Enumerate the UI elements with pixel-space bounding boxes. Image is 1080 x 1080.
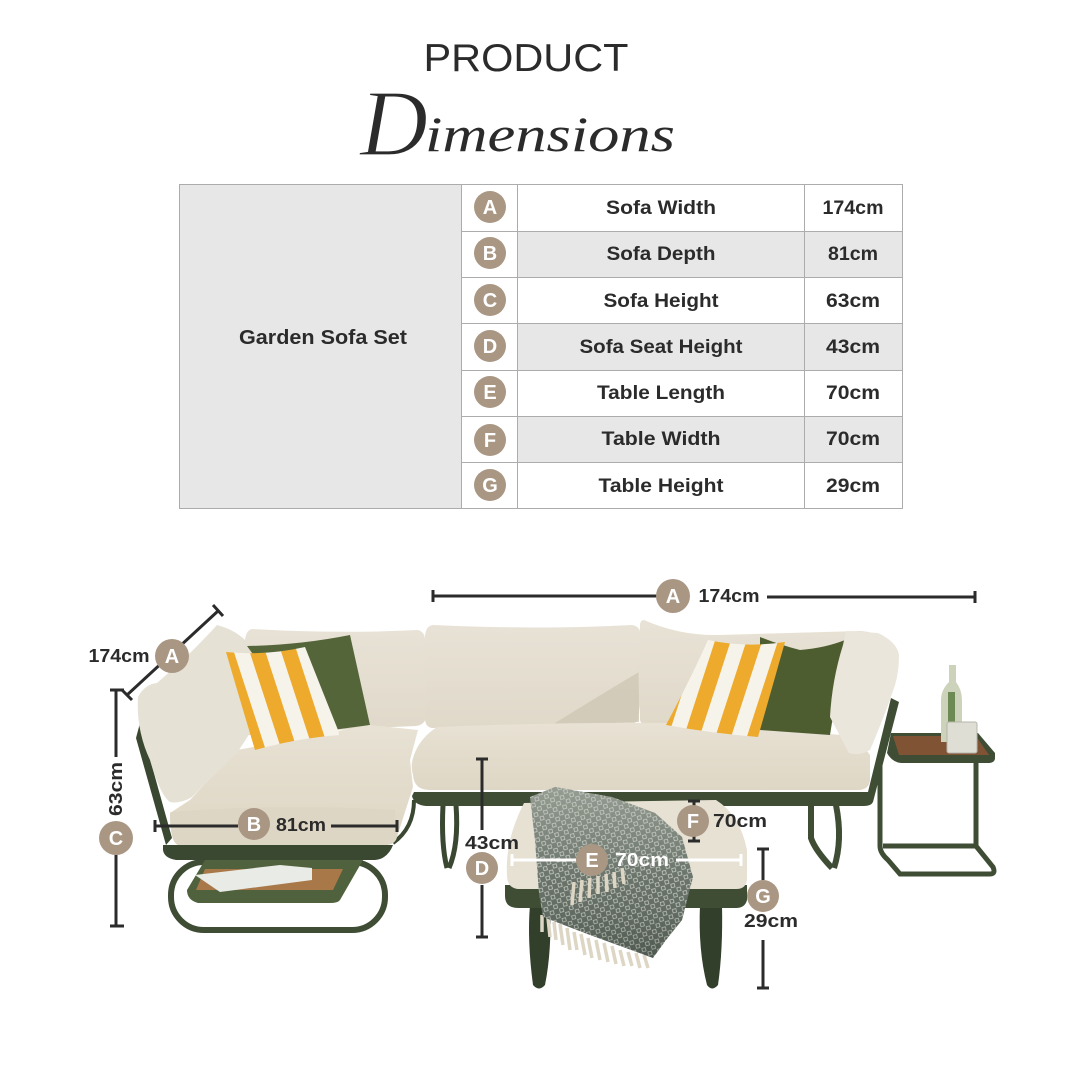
measurement A left bbox=[88, 605, 223, 700]
right arm cushion bbox=[830, 631, 899, 754]
value: 70cm bbox=[615, 849, 669, 870]
ottoman legs bbox=[529, 905, 722, 988]
dimensions table bbox=[180, 184, 902, 508]
measurement D bbox=[465, 759, 519, 937]
badge: F bbox=[687, 811, 699, 833]
centre leg of sofa bbox=[442, 805, 457, 868]
row E text: Table Length bbox=[597, 383, 725, 404]
badge B: B bbox=[483, 243, 497, 265]
measurement F bbox=[677, 801, 767, 841]
blanket light overlay bbox=[530, 787, 693, 958]
badge G bbox=[474, 469, 506, 501]
blanket inner fringe bbox=[572, 868, 624, 905]
side table bbox=[880, 665, 995, 874]
badge D bbox=[474, 330, 506, 362]
badge bbox=[238, 808, 270, 840]
row D text: 43cm bbox=[826, 337, 880, 358]
badge F: F bbox=[484, 430, 496, 452]
right back cushion 1 bbox=[424, 625, 641, 728]
badge: E bbox=[585, 850, 599, 872]
badge G: G bbox=[482, 475, 498, 497]
measurement B bbox=[155, 808, 397, 840]
badge E bbox=[474, 376, 506, 408]
ottoman frame bbox=[505, 885, 747, 908]
row C text bbox=[604, 291, 880, 312]
title: Dimensions script: imensions bbox=[425, 106, 675, 162]
left rear back cushion bbox=[245, 629, 426, 735]
value: 174cm bbox=[698, 585, 760, 606]
badge B bbox=[474, 237, 506, 269]
right sofa frame bbox=[412, 698, 899, 806]
shaded row D bbox=[517, 323, 902, 370]
bottle and glass bbox=[941, 665, 977, 753]
badge: G bbox=[755, 886, 771, 908]
badge F bbox=[474, 424, 506, 456]
row A text: Sofa Width bbox=[606, 198, 716, 219]
row E text: 70cm bbox=[826, 383, 880, 404]
badge: A bbox=[666, 586, 680, 608]
badge bbox=[656, 579, 690, 613]
row D text bbox=[580, 337, 880, 358]
value: 81cm bbox=[276, 814, 326, 835]
badge A bbox=[474, 191, 506, 223]
panel: product name cell bbox=[180, 185, 461, 508]
left frame back bbox=[136, 723, 172, 845]
shadow on back cushion bbox=[552, 672, 639, 725]
title: PRODUCT: PRODUCT bbox=[424, 37, 628, 80]
left under loop bbox=[171, 862, 385, 930]
blanket fringe lower bbox=[542, 915, 648, 968]
left shelf bbox=[187, 860, 363, 903]
title: Dimensions script: D bbox=[358, 72, 428, 176]
measurement C bbox=[99, 690, 133, 926]
garden sofa illustration bbox=[136, 620, 995, 988]
row G text: Table Height bbox=[598, 476, 724, 497]
measurement A top bbox=[433, 579, 975, 613]
badge A: A bbox=[483, 197, 497, 219]
shaded row B bbox=[517, 231, 902, 277]
ottoman cushion bbox=[507, 800, 747, 889]
value: 63cm bbox=[105, 762, 126, 816]
badge: D bbox=[475, 858, 489, 880]
badge bbox=[576, 844, 608, 876]
left seat cushion bbox=[170, 725, 418, 845]
row C text: 63cm bbox=[826, 291, 880, 312]
row B text: 81cm bbox=[828, 244, 878, 265]
row D text: Sofa Seat Height bbox=[580, 337, 743, 358]
row G text: 29cm bbox=[826, 476, 880, 497]
left seat front band bbox=[170, 807, 397, 845]
left seat frame bbox=[163, 845, 393, 860]
right back cushion 2 bbox=[638, 620, 880, 724]
badge bbox=[99, 821, 133, 855]
left back cushion bbox=[138, 625, 250, 802]
row F text: Table Width bbox=[602, 429, 720, 450]
badge D: D bbox=[483, 336, 497, 358]
measurement E bbox=[512, 844, 741, 876]
yellow pillow left bbox=[226, 647, 340, 750]
green pillow right bbox=[760, 637, 845, 735]
row F text: 70cm bbox=[826, 429, 880, 450]
row A text: 174cm bbox=[822, 198, 884, 219]
badge: A bbox=[165, 646, 179, 668]
throw blanket bbox=[530, 787, 693, 968]
yellow pillow right bbox=[666, 640, 785, 737]
row G text bbox=[598, 476, 880, 497]
right leg of sofa bbox=[811, 805, 839, 868]
row A text bbox=[606, 198, 884, 219]
product name: Garden Sofa Set bbox=[239, 327, 407, 349]
badge bbox=[466, 852, 498, 884]
sofa seat cushion bbox=[412, 723, 870, 790]
value: 29cm bbox=[744, 910, 798, 931]
row F text bbox=[602, 429, 880, 450]
value: 43cm bbox=[465, 832, 519, 853]
badge: C bbox=[109, 828, 123, 850]
badge: B bbox=[247, 814, 261, 836]
value: 70cm bbox=[713, 810, 767, 831]
curved connector bbox=[393, 800, 414, 843]
row E text bbox=[597, 383, 880, 404]
shaded row F bbox=[517, 416, 902, 462]
left green pillow bbox=[247, 635, 370, 733]
badge E: E bbox=[483, 382, 497, 404]
row B text bbox=[606, 244, 878, 265]
table grid bbox=[180, 184, 902, 508]
badge C bbox=[474, 284, 506, 316]
row C text: Sofa Height bbox=[604, 291, 719, 312]
badge C: C bbox=[483, 290, 497, 312]
row B text: Sofa Depth bbox=[606, 244, 716, 265]
value: 174cm bbox=[88, 645, 150, 666]
measurement G bbox=[744, 849, 798, 988]
